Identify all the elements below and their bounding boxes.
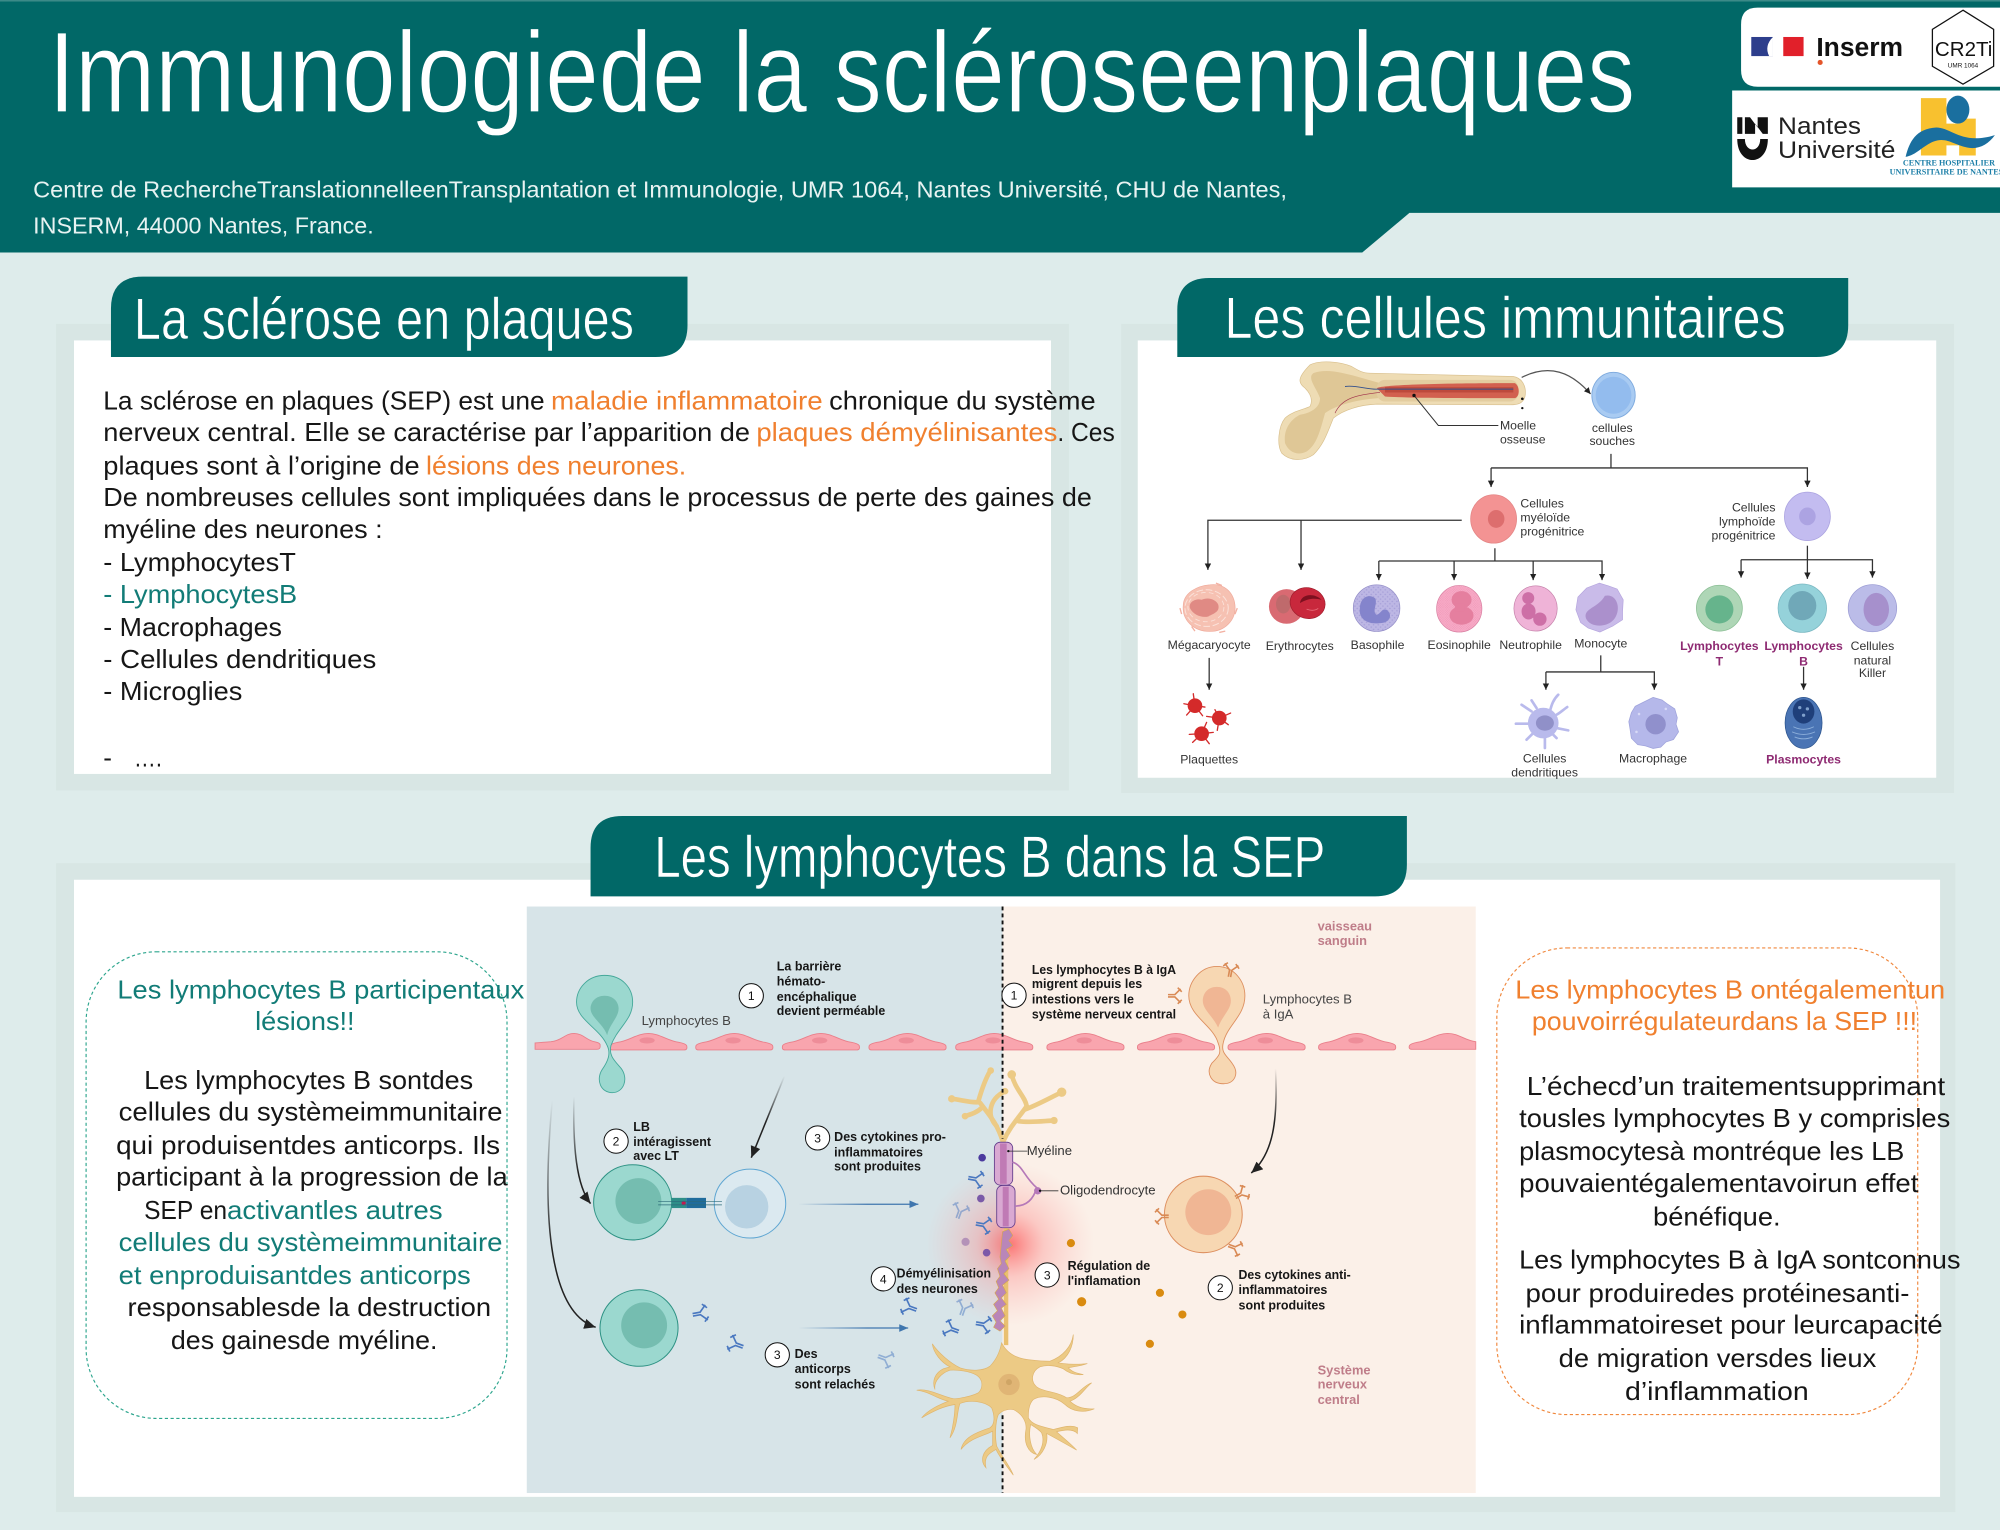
step 4: 4 bbox=[880, 1272, 887, 1286]
header band bbox=[0, 0, 2000, 252]
antibodies bbox=[691, 1169, 993, 1370]
label: cellules myéloïde progénitrice: myéloïde bbox=[1520, 510, 1570, 524]
step 3 cytokines: inflammatoires bbox=[834, 1145, 923, 1159]
step 1 right: intestions vers le bbox=[1032, 992, 1134, 1006]
panel: la sclérose en plaques bbox=[56, 277, 1115, 790]
cell: migrating lymphocyte B bbox=[577, 975, 633, 1093]
divider dotted bbox=[1002, 907, 1004, 1493]
cell labels row: Neutrophile bbox=[1499, 638, 1562, 652]
cytokines orange bbox=[1067, 1239, 1186, 1348]
label: moelle osseuse: osseuse bbox=[1500, 433, 1546, 447]
label: cellules dendritiques bbox=[1511, 751, 1578, 779]
icon: NK cell bbox=[1848, 585, 1897, 632]
cell labels row bbox=[1168, 637, 1894, 680]
axon demyelinated bbox=[992, 1225, 1013, 1345]
callout: regulatory role: inflammatoireset pour leurcapacité bbox=[1519, 1310, 1943, 1340]
cell labels row: Killer bbox=[1859, 666, 1886, 680]
cell labels row: B bbox=[1799, 655, 1808, 669]
title: Immunologiede la scléroseenplaques bbox=[48, 9, 1635, 137]
body text: - Macrophages bbox=[103, 612, 282, 642]
step 4: Démyélinisation bbox=[897, 1267, 991, 1281]
logos: Inserm and CR2TI bbox=[1741, 8, 2000, 87]
step 3 cytokines: Des cytokines pro- bbox=[834, 1130, 946, 1144]
label: oligodendrocyte: Oligodendrocyte bbox=[1060, 1183, 1156, 1198]
logos: Nantes Université and CHU: Nantes bbox=[1778, 113, 1861, 140]
step 3 right bbox=[1035, 1259, 1150, 1288]
icon: basophile bbox=[1353, 585, 1400, 631]
affiliation text bbox=[33, 177, 1287, 238]
cell labels row: T bbox=[1716, 655, 1724, 669]
step 3 cytokines: sont produites bbox=[834, 1159, 921, 1173]
icon: mégacaryocyte bbox=[1180, 583, 1237, 632]
icon: plaquettes bbox=[1184, 694, 1231, 744]
body text: La sclérose en plaques (SEP) est une bbox=[103, 385, 545, 415]
step 3 right: Régulation de bbox=[1068, 1259, 1150, 1273]
body text: myéline des neurones : bbox=[103, 514, 383, 544]
step 3 right: 3 bbox=[1044, 1268, 1051, 1282]
step 3 cytokines: 3 bbox=[814, 1131, 821, 1145]
body text: maladie inflammatoire bbox=[551, 385, 823, 415]
icon: macrophage bbox=[1629, 697, 1679, 748]
heading tab: les cellules immunitaires: Les cellules immunitaires bbox=[1224, 286, 1786, 351]
step 4: des neurones bbox=[897, 1282, 978, 1296]
panel: les cellules immunitaires bbox=[1121, 278, 1954, 793]
cell labels row: Lymphocytes bbox=[1680, 639, 1759, 653]
label: moelle osseuse: Moelle bbox=[1500, 419, 1536, 433]
icon: monocyte bbox=[1576, 583, 1623, 632]
step 3 antibodies: 3 bbox=[774, 1348, 781, 1362]
heading tab: lymphocytes B: Les lymphocytes B dans la SEP bbox=[654, 825, 1325, 890]
icon: eosinophile bbox=[1437, 585, 1482, 632]
callout: regulatory role: pour produiredes protéinesanti- bbox=[1526, 1278, 1909, 1308]
label: myéline: Myéline bbox=[1027, 1143, 1072, 1158]
body text: De nombreuses cellules sont impliquées dans le processus de perte des gaines de bbox=[103, 482, 1092, 512]
callout: pro-inflammatory role: Les lymphocytes B sontdes bbox=[144, 1065, 473, 1095]
cytokines purple bbox=[961, 1154, 990, 1257]
body text: plaques sont à l’origine de bbox=[103, 450, 420, 480]
callout: regulatory role: d’inflammation bbox=[1625, 1376, 1809, 1406]
icon: plasmocyte bbox=[1785, 697, 1822, 748]
callout: pro-inflammatory role: SEP en bbox=[144, 1195, 227, 1225]
step 2 left: LB bbox=[633, 1120, 650, 1134]
body text: …. bbox=[134, 742, 162, 772]
icon: lymphoid progenitor bbox=[1784, 492, 1830, 541]
label: cellules lymphoïde progénitrice: lymphoïde bbox=[1719, 514, 1776, 528]
callout: pro-inflammatory role: cellules du systèmeimmunitaire bbox=[119, 1227, 503, 1257]
inflammation glow bbox=[926, 1163, 1094, 1326]
label: lymphocytes B à IgA bbox=[1263, 991, 1352, 1022]
step 1 left: hémato- bbox=[777, 975, 825, 989]
step 2 right: Des cytokines anti- bbox=[1239, 1268, 1351, 1282]
label: lymphocytes B à IgA: Lymphocytes B bbox=[1263, 991, 1352, 1006]
label: lymphocytes B à IgA: à IgA bbox=[1263, 1007, 1294, 1022]
step 1 right bbox=[1002, 963, 1176, 1022]
body text: - Microglies bbox=[103, 676, 242, 706]
neuron: dendrites top bbox=[948, 1067, 1066, 1141]
step 2 right: inflammatoires bbox=[1239, 1283, 1327, 1297]
logos: Nantes Université and CHU bbox=[1732, 91, 2000, 187]
affiliation text: Centre de RechercheTranslationnelleenTransplantation et Immunologie, UMR 1064, Nantes Université, CHU de Nantes, bbox=[33, 177, 1287, 203]
label: système nerveux central: nerveux bbox=[1318, 1376, 1368, 1391]
body text: chronique du système bbox=[829, 385, 1096, 415]
diagram: lymphocytes B mechanisms bbox=[527, 907, 1476, 1493]
step 1 right: migrent depuis les bbox=[1032, 977, 1142, 991]
neuron: soma and dendrites bbox=[917, 1335, 1094, 1475]
arrow to IgA cell bbox=[1251, 1068, 1276, 1173]
logos: Nantes Université and CHU: Université bbox=[1778, 137, 1895, 164]
logos: Inserm and CR2TI: CR2Ti bbox=[1935, 39, 1992, 61]
step 1 right: 1 bbox=[1011, 989, 1018, 1003]
callout: pro-inflammatory role: et enproduisantdes anticorps bbox=[119, 1260, 471, 1290]
arrow: marrow to stem cell bbox=[1522, 371, 1591, 394]
icon: lymphocyte T bbox=[1696, 585, 1742, 631]
callout: regulatory role: pouvoirrégulateurdans la SEP !!! bbox=[1532, 1006, 1917, 1036]
callout: pro-inflammatory role: des gainesde myéline. bbox=[171, 1325, 438, 1355]
step 4 bbox=[871, 1267, 991, 1296]
label: système nerveux central bbox=[1318, 1362, 1371, 1407]
callout: pro-inflammatory role: lésions!! bbox=[255, 1006, 355, 1036]
step 1 left: encéphalique bbox=[777, 990, 857, 1004]
step 1 right: système nerveux central bbox=[1032, 1008, 1176, 1022]
label: cellules souches bbox=[1589, 421, 1635, 448]
endothelial barrier bbox=[535, 1033, 1476, 1050]
body text: - LymphocytesB bbox=[103, 579, 297, 609]
step 1 right: Les lymphocytes B à IgA bbox=[1032, 963, 1176, 977]
callout: regulatory role: tousles lymphocytes B y comprisles bbox=[1519, 1103, 1950, 1133]
label: vaisseau sanguin: vaisseau bbox=[1318, 919, 1372, 934]
label: cellules souches: cellules bbox=[1592, 421, 1633, 435]
body text: . Ces bbox=[1057, 417, 1115, 447]
icon: cellule dendritique bbox=[1516, 695, 1568, 748]
icon: erythrocytes bbox=[1269, 584, 1329, 624]
label: cellules lymphoïde progénitrice: progénitrice bbox=[1712, 528, 1776, 542]
step 2 right bbox=[1208, 1268, 1351, 1312]
step 3 antibodies: Des bbox=[795, 1347, 818, 1361]
step 1 left: La barrière bbox=[777, 959, 841, 973]
cell: migrating lymphocyte B IgA bbox=[1168, 962, 1245, 1084]
label: cellules dendritiques: Cellules bbox=[1523, 751, 1566, 765]
label: système nerveux central: central bbox=[1318, 1392, 1360, 1407]
icon: neutrophile bbox=[1514, 586, 1557, 631]
step 3 cytokines bbox=[805, 1126, 946, 1173]
label: vaisseau sanguin: sanguin bbox=[1318, 933, 1367, 948]
cell labels row: Basophile bbox=[1351, 638, 1405, 652]
callout: regulatory role: de migration versdes lieux bbox=[1559, 1343, 1876, 1373]
step 3 antibodies: anticorps bbox=[795, 1362, 851, 1376]
step 2 left: avec LT bbox=[633, 1149, 679, 1163]
cell: lymphocyte B IgA bbox=[1155, 1176, 1251, 1258]
label: cellules souches: souches bbox=[1589, 434, 1635, 448]
heading tab: lymphocytes B bbox=[591, 816, 1407, 896]
label: plaquettes: Plaquettes bbox=[1180, 753, 1238, 767]
callout: pro-inflammatory role: Les lymphocytes B participentaux bbox=[117, 974, 524, 1004]
icon: lymphocyte B bbox=[1778, 584, 1827, 632]
icon: bone with marrow bbox=[1279, 362, 1525, 460]
label: plasmocytes: Plasmocytes bbox=[1766, 753, 1841, 767]
icon: myeloid progenitor bbox=[1471, 495, 1517, 543]
tree arrows bbox=[1208, 454, 1872, 690]
body text: lésions des neurones. bbox=[426, 450, 686, 480]
body text: - Cellules dendritiques bbox=[103, 644, 376, 674]
callout: pro-inflammatory role: participant à la progression de la bbox=[116, 1162, 508, 1192]
callout: pro-inflammatory role: qui produisentdes anticorps. Ils bbox=[116, 1130, 500, 1160]
logos: Nantes Université and CHU: UNIVERSITAIRE DE NANTES bbox=[1890, 168, 2000, 177]
body text bbox=[103, 385, 1115, 772]
step 2 left: 2 bbox=[613, 1135, 620, 1149]
callout: regulatory role: L’échecd’un traitementsupprimant bbox=[1527, 1071, 1946, 1101]
callout: regulatory role: Les lymphocytes B à IgA sontconnus bbox=[1519, 1245, 1960, 1275]
step 2 left: intéragissent bbox=[633, 1135, 711, 1149]
arrows from lymphocyte B bbox=[548, 1076, 784, 1327]
callout: pro-inflammatory role: responsablesde la destruction bbox=[128, 1292, 491, 1322]
step 3 antibodies bbox=[765, 1343, 875, 1391]
icon: stem cell bbox=[1592, 372, 1635, 418]
step 2 right: sont produites bbox=[1239, 1298, 1325, 1312]
step 2 right: 2 bbox=[1217, 1281, 1224, 1295]
label: vaisseau sanguin bbox=[1318, 919, 1372, 948]
label: macrophage: Macrophage bbox=[1619, 751, 1687, 765]
step 2 left bbox=[604, 1120, 711, 1163]
label: lymphocytes B: Lymphocytes B bbox=[642, 1013, 731, 1028]
body text: plaques démyélinisantes bbox=[756, 417, 1057, 447]
label: cellules dendritiques: dendritiques bbox=[1511, 765, 1578, 779]
body text: nerveux central. Elle se caractérise par l’apparition de bbox=[103, 417, 750, 447]
cell labels row: Monocyte bbox=[1574, 637, 1627, 651]
cell labels row: Lymphocytes bbox=[1764, 639, 1843, 653]
callout: regulatory role: Les lymphocytes B ontégalementun bbox=[1515, 974, 1945, 1004]
myelin sheaths and oligodendrocyte bbox=[994, 1142, 1058, 1228]
body text: - LymphocytesT bbox=[103, 547, 296, 577]
cell labels row: natural bbox=[1854, 653, 1891, 667]
logos: Inserm and CR2TI: Inserm bbox=[1816, 34, 1903, 62]
callout: pro-inflammatory role bbox=[86, 952, 524, 1418]
cell: plasma LB bbox=[600, 1290, 678, 1366]
cell: LT bbox=[714, 1169, 786, 1238]
logos: Nantes Université and CHU: CENTRE HOSPITALIER bbox=[1903, 159, 1995, 168]
step 1 left: 1 bbox=[748, 989, 755, 1003]
step 1 left: devient perméable bbox=[777, 1004, 885, 1018]
callout: regulatory role bbox=[1497, 948, 1960, 1415]
body text: - bbox=[103, 742, 112, 772]
label: cellules myéloïde progénitrice bbox=[1520, 496, 1585, 538]
cell labels row: Mégacaryocyte bbox=[1168, 638, 1251, 652]
label: moelle osseuse bbox=[1500, 419, 1546, 447]
panel: les lymphocytes B dans la SEP bbox=[56, 816, 1960, 1512]
cell labels row: Eosinophile bbox=[1428, 638, 1491, 652]
label: système nerveux central: Système bbox=[1318, 1362, 1371, 1377]
label: cellules myéloïde progénitrice: progénitrice bbox=[1520, 525, 1585, 538]
label: cellules lymphoïde progénitrice bbox=[1712, 500, 1776, 542]
step 3 right: l'inflamation bbox=[1068, 1274, 1141, 1288]
step 1 left bbox=[739, 959, 885, 1018]
heading tab: la sclérose en plaques: La sclérose en plaques bbox=[134, 287, 634, 352]
label: cellules lymphoïde progénitrice: Cellules bbox=[1732, 500, 1776, 514]
callout: regulatory role: bénéfique. bbox=[1653, 1201, 1781, 1231]
label: cellules myéloïde progénitrice: Cellules bbox=[1520, 496, 1564, 510]
logos: Inserm and CR2TI: UMR 1064 bbox=[1948, 63, 1979, 70]
cell labels row: Erythrocytes bbox=[1266, 639, 1334, 653]
cell: LB interacting bbox=[594, 1165, 672, 1240]
callout: pro-inflammatory role: activantles autres bbox=[227, 1195, 443, 1225]
step 3 antibodies: sont relachés bbox=[795, 1377, 875, 1391]
affiliation text: INSERM, 44000 Nantes, France. bbox=[33, 212, 374, 238]
callout: regulatory role: pouvaientégalementavoirun effet bbox=[1519, 1168, 1919, 1198]
cell labels row: Cellules bbox=[1851, 639, 1894, 653]
synapse LB-LT bbox=[658, 1198, 722, 1208]
callout: regulatory role: plasmocytesà montréque les LB bbox=[1519, 1136, 1904, 1166]
blue arrows bbox=[788, 1204, 918, 1328]
callout: pro-inflammatory role: cellules du systèmeimmunitaire bbox=[119, 1097, 503, 1127]
